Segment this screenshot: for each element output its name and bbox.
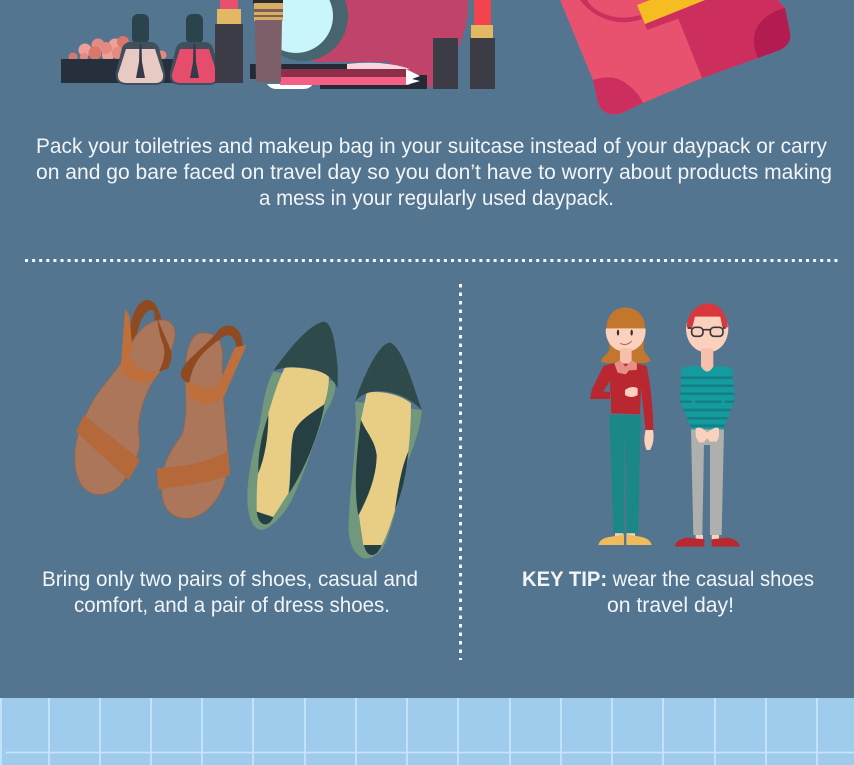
text block: toiletries tip (36, 135, 832, 210)
icon: pink nail polish (170, 14, 219, 85)
icon: mirror (258, 0, 348, 61)
icon: left flat (247, 322, 338, 530)
illustration: dress shoes (247, 322, 422, 559)
text block: shoes tip: Bring only two pairs of shoes, casual and (42, 568, 418, 591)
icon: brushes and pencils (250, 63, 427, 89)
figure: woman (590, 308, 654, 545)
icon: red lipstick (470, 0, 495, 89)
text block: toiletries tip: Pack your toiletries and makeup bag in your suitcase instead of your daypack or carry (36, 135, 827, 158)
icon: lipstick (215, 0, 243, 83)
text block: key tip: KEY TIP: wear the casual shoes (522, 568, 814, 591)
illustration: pink toiletry bag (560, 0, 790, 114)
illustration: two travellers (590, 303, 740, 547)
text block: shoes tip: comfort, and a pair of dress shoes. (74, 594, 390, 617)
icon: red makeup bag (313, 0, 468, 87)
text block: key tip: on travel day! (607, 594, 734, 617)
text block: shoes tip (42, 568, 418, 617)
text block: key tip (522, 568, 814, 617)
footer band: light blue grid (0, 698, 854, 765)
illustration: sandals (75, 300, 247, 518)
icon: right sandal (157, 326, 247, 518)
icon: tube (253, 0, 283, 82)
text block: toiletries tip: on and go bare faced on travel day so you don’t have to worry about products making (36, 161, 832, 184)
illustration: makeup collection (61, 0, 495, 89)
icon: right flat (348, 343, 422, 559)
text block: toiletries tip: a mess in your regularly used daypack. (259, 187, 614, 210)
icon: blush compact (61, 36, 173, 83)
icon: nude nail polish (116, 14, 165, 85)
icon: dark box (433, 38, 458, 89)
icon: left sandal (75, 300, 175, 495)
figure: man (675, 303, 740, 547)
